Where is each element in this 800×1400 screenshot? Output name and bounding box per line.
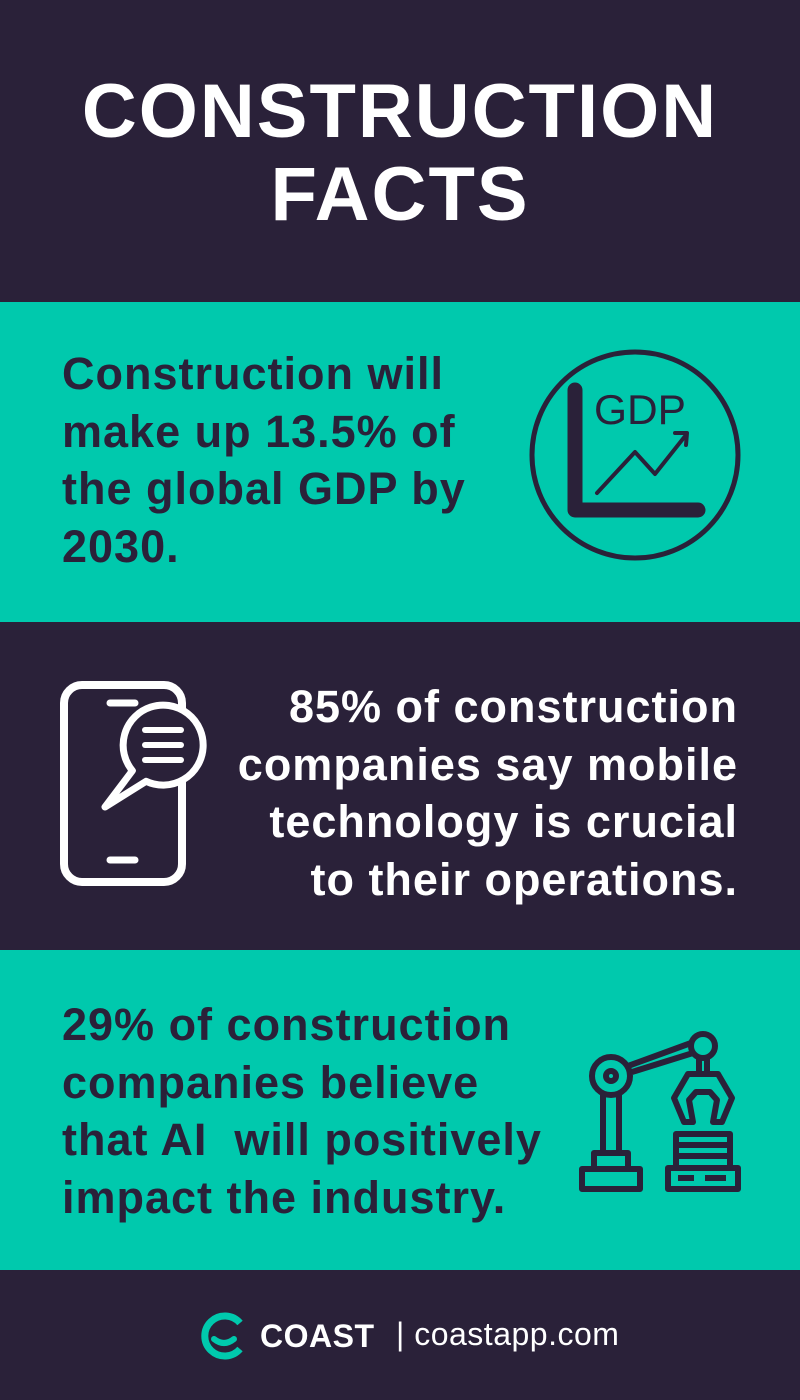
text: GDP fact: Construction will [62,348,444,399]
text: GDP fact: the global GDP by [62,463,466,514]
icon: GDP chart [530,350,740,560]
logo icon [201,1312,243,1360]
icon: GDP chart: GDP [594,386,686,433]
text: mobile fact: 85% of construction [289,681,738,732]
text: AI fact: companies believe [62,1056,479,1108]
panel: GDP fact [0,302,800,622]
footer [201,1312,619,1360]
text: mobile fact [238,681,738,904]
text: AI fact [62,999,542,1222]
logo text: COAST [260,1318,374,1354]
text: AI fact: that AI will positively [62,1114,542,1165]
icon: phone [60,681,207,886]
text: GDP fact [62,348,466,572]
panel: AI fact [0,950,800,1270]
icon: robot arm [579,1031,741,1192]
title: FACTS [270,152,530,237]
panel: mobile fact [60,681,738,904]
text: AI fact: 29% of construction [62,999,511,1050]
title [82,69,718,237]
text: GDP fact: 2030. [62,520,180,572]
title: CONSTRUCTION [82,69,718,154]
text: mobile fact: technology is crucial [269,796,738,847]
text: mobile fact: companies say mobile [238,738,738,790]
website: | coastapp.com [396,1316,619,1352]
text: GDP fact: make up 13.5% of [62,406,456,456]
text: mobile fact: to their operations. [310,854,738,904]
text: AI fact: impact the industry. [62,1172,506,1222]
